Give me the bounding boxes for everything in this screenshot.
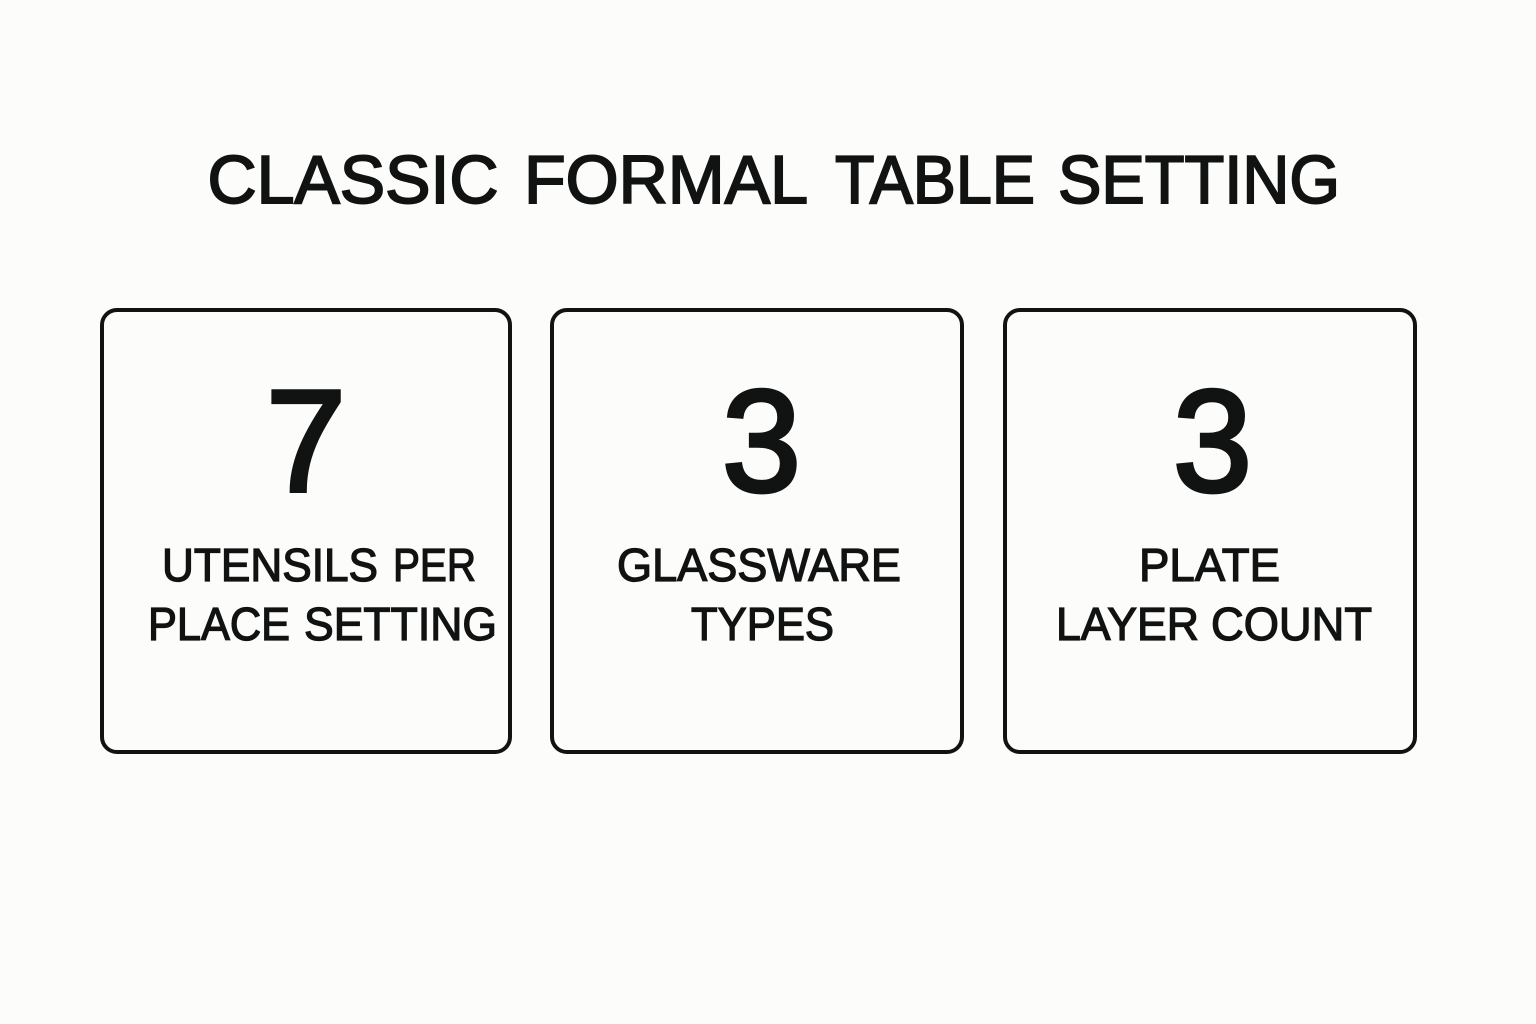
label: utensils per place setting: PER	[393, 539, 476, 591]
number: 3: 3	[1173, 360, 1252, 522]
label: utensils per place setting: PLACE	[148, 598, 290, 650]
label: utensils per place setting: UTENSILS	[162, 539, 378, 591]
card outline: plates	[1005, 310, 1415, 752]
label: plate layer count	[1056, 539, 1372, 650]
panel: plates	[1005, 310, 1415, 752]
title	[208, 142, 1340, 218]
label: plate layer count: LAYER	[1056, 598, 1199, 650]
label: glassware types	[617, 539, 901, 650]
label: glassware types: GLASSWARE	[617, 539, 901, 591]
title: CLASSIC	[208, 142, 498, 218]
label: utensils per place setting	[148, 539, 497, 650]
number: 7: 7	[266, 360, 346, 522]
number: 3: 3	[722, 360, 801, 522]
card outline: glassware	[552, 310, 962, 752]
panel: utensils	[102, 310, 510, 752]
card outline: utensils	[102, 310, 510, 752]
label: utensils per place setting: SETTING	[304, 598, 497, 650]
label: plate layer count: PLATE	[1139, 539, 1280, 591]
title: TABLE	[835, 142, 1035, 218]
panel: glassware	[552, 310, 962, 752]
title: SETTING	[1058, 142, 1340, 218]
label: glassware types: TYPES	[691, 598, 834, 650]
title: FORMAL	[524, 142, 808, 218]
label: plate layer count: COUNT	[1211, 598, 1372, 650]
